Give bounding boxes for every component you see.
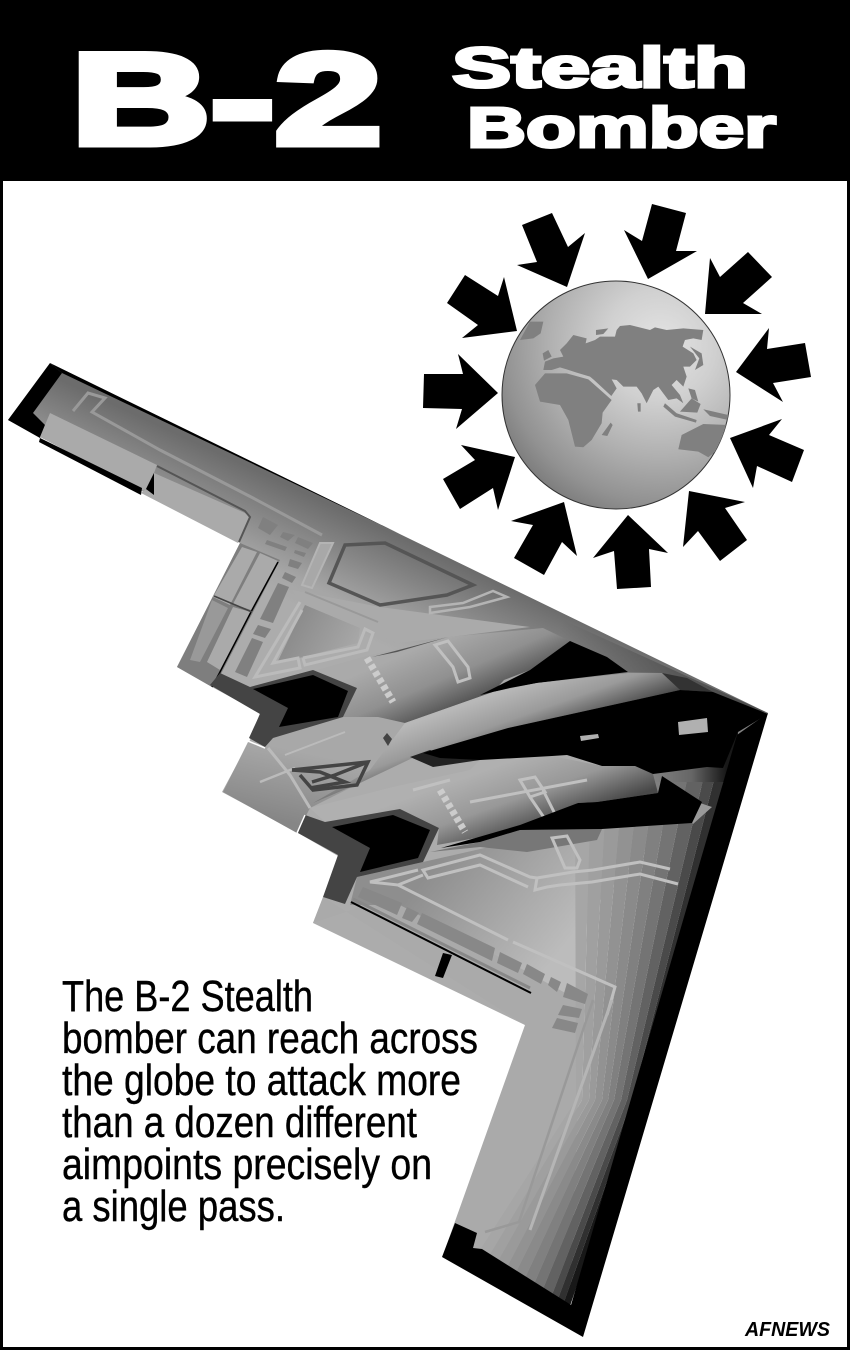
trailing strip [353,899,530,988]
small light panels [580,718,708,741]
Sumatra and Java [663,403,697,423]
text line: than a dozen different [62,1098,417,1147]
fuselage lines [285,732,345,755]
light patch beside lower black wedge [690,802,712,824]
upper nacelle [313,628,570,723]
text line: the globe to attack more [62,1056,461,1105]
central light wing area [292,590,530,643]
outer control surface [40,413,157,490]
upper intake [253,675,348,727]
arrow [447,275,517,338]
white slits [248,741,305,833]
arrow [511,502,577,575]
arrow [517,213,585,287]
New Guinea [703,409,728,420]
shaded under lower nacelle [430,829,602,852]
left wing base [8,364,768,1025]
aft centre wing [350,835,578,1000]
upper dotted seam [367,658,393,702]
light strip [302,543,333,588]
fuselage lines [268,748,310,808]
aft wing seams [485,1000,593,1232]
large black underside [423,690,768,774]
title: Stealth: Stealth [452,36,748,100]
black strip under surface [39,438,142,495]
trailing hinge line [351,902,531,993]
British Isles [543,350,552,361]
upper nacelle band [435,641,470,682]
arrow [683,491,747,561]
icon: globe with continents [502,281,730,509]
Africa [535,373,612,447]
aft wing seam lines [370,836,678,1015]
inboard flaps [177,543,280,687]
aft wing seams [530,1000,612,1230]
right wing stepped shading [480,780,735,1306]
leading edge line [50,363,400,534]
flap cross line [214,596,252,612]
arrow [593,515,668,589]
Borneo [680,398,701,413]
text line: a single pass. [62,1182,285,1231]
upper intake surround [210,670,357,747]
flap hinge line [212,562,278,687]
upper black wedge [480,641,628,695]
Eurasia [543,325,703,403]
arrow [730,419,804,488]
flap panel [207,607,251,670]
text line: bomber can reach across [62,1014,478,1063]
Madagascar [602,423,613,436]
seam band [430,591,507,613]
flap panel [190,600,228,662]
body text block [62,972,478,1231]
lower dotted seam [440,790,465,832]
arrow [443,445,515,510]
centre panel frame [303,629,373,665]
lower intake [332,815,430,872]
B-2 bomber aircraft [8,363,768,1337]
black wedge [146,473,154,495]
lower nacelle [310,756,658,845]
title [71,26,776,172]
Philippines [688,388,698,402]
lower nacelle band [413,777,587,822]
dark nacelle nose [662,673,713,692]
text line: aimpoints precisely on [62,1140,432,1189]
cockpit area outline [329,543,473,605]
centre fuselage [223,717,423,833]
Australia [678,424,728,457]
small diamond [383,733,392,746]
black control surface split [435,953,452,978]
Greenland [520,322,543,340]
cockpit windows [292,762,368,790]
fuselage lines [260,768,295,782]
seam line [305,592,378,622]
arrow [705,252,772,314]
Sri Lanka [637,403,641,412]
wing panel lines [73,393,322,535]
Arctic islands [596,328,608,335]
lower black wedge [441,776,702,848]
inner wing panels [235,517,313,677]
centre panel [277,605,360,663]
arrows pointing at globe [423,204,811,589]
arrow [736,328,811,402]
dark throat between nacelles [410,742,480,767]
left wing tip [8,363,62,438]
text line: The B-2 Stealth [62,972,313,1021]
aft wing panels [358,887,588,1033]
title: B-2: B-2 [71,26,382,172]
surface edge [157,466,250,542]
title: Bomber: Bomber [467,96,776,160]
corner shading above nacelle [530,605,768,713]
middle nacelle [313,673,680,803]
right wing flat base [313,840,578,1306]
lower intake surround [298,809,439,904]
arrow [423,354,498,429]
credit: AFNEWS: AFNEWS [744,1319,831,1341]
shaded strip beside tail of black underside [640,732,738,782]
upper dark slit [372,637,448,657]
arrow [624,204,697,279]
flap panel [233,553,278,610]
Japan [690,347,703,370]
centre panel frame [255,602,302,677]
inner control surface [141,473,250,543]
right edge and bottom tip black band [442,713,768,1337]
flap panel [213,547,257,605]
